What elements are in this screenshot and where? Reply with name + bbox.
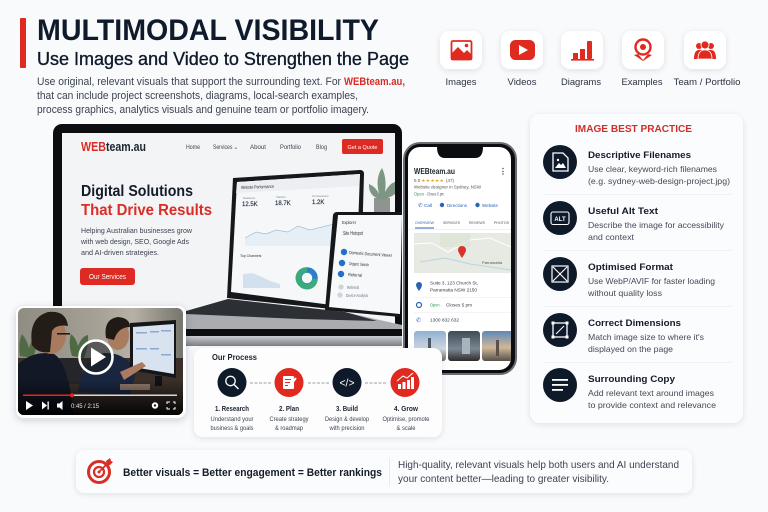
listing tabs: OVERVIEW <box>415 221 434 225</box>
keyboard base <box>186 299 402 336</box>
icon: diagrams: Diagrams <box>561 77 601 88</box>
listing action links: ✆ <box>418 202 423 209</box>
step 3: build <box>325 368 370 432</box>
icon: team / portfolio: Team / Portfolio <box>674 77 740 88</box>
step 2: plan <box>270 368 308 432</box>
header: title block <box>20 14 409 116</box>
small laptop with analytics: 18.7K <box>275 201 291 207</box>
step 2: plan: 2. Plan <box>279 404 299 413</box>
tablet: Site Hotspot <box>343 231 363 237</box>
business listing header: ★★★★★ <box>421 178 445 183</box>
intro paragraph: process graphics, analytics visuals and genuine team or portfolio imagery. <box>37 104 369 116</box>
item: descriptive filenames <box>543 145 730 186</box>
step 3: build: with precision <box>329 426 364 432</box>
step 4: grow: Optimise, promote <box>382 417 430 423</box>
item: correct dimensions: Match image size to where it's <box>588 332 704 342</box>
listing address, hours, phone: Parramatta NSW 2150 <box>430 288 478 292</box>
website nav: Blog <box>316 145 327 151</box>
business listing header: ⋮ <box>499 167 507 176</box>
play button <box>80 340 112 374</box>
laptop lid and screen <box>53 124 402 336</box>
step 3: build: </> <box>340 378 354 390</box>
step 1: research: business & goals <box>210 426 254 432</box>
small laptop with analytics: Sessions <box>243 196 256 200</box>
video player card <box>16 306 186 418</box>
website nav: Services ⌄ <box>213 145 238 151</box>
step 4: grow <box>382 368 430 432</box>
intro paragraph <box>37 76 405 116</box>
website hero copy: with web design, SEO, Google Ads <box>80 237 189 246</box>
listing tabs: REVIEWS <box>469 221 485 225</box>
panel: image best practice <box>530 114 743 423</box>
tablet: Referral <box>347 285 359 290</box>
callout: key takeaway banner <box>76 450 692 493</box>
listing tabs: PHOTOS <box>494 221 509 225</box>
small laptop with analytics: Visitors <box>276 195 286 199</box>
step 1: research: Understand your <box>210 417 254 423</box>
website nav: team.au <box>106 140 146 154</box>
listing action links: Directions <box>447 203 468 208</box>
step 1: research <box>210 368 254 432</box>
listing photos <box>414 331 514 361</box>
listing action links: Website <box>482 203 498 208</box>
item: useful alt text: Useful Alt Text <box>588 206 659 217</box>
item: optimised format: without quality loss <box>587 288 662 298</box>
icon: images <box>440 31 482 88</box>
small laptop with analytics: 12.5K <box>242 202 258 208</box>
website nav: Portfolio <box>280 145 302 151</box>
step 2: plan: & roadmap <box>275 426 304 432</box>
player controls <box>26 401 175 410</box>
business listing header: 5.0 <box>414 178 421 183</box>
phone body <box>403 142 517 375</box>
listing address, hours, phone: 1300 832 632 <box>430 318 460 322</box>
panel: our process <box>194 348 442 437</box>
item: optimised format <box>543 257 715 298</box>
takeaway headline: Better visuals = Better engagement = Better rankings <box>123 467 382 479</box>
takeaway explanation <box>398 459 679 485</box>
item: surrounding copy <box>543 368 716 410</box>
item: correct dimensions: displayed on the page <box>588 344 673 354</box>
listing address, hours, phone: Open · <box>430 302 442 308</box>
website nav <box>81 139 383 154</box>
listing tabs: SERVICES <box>443 221 460 225</box>
item: optimised format: Optimised Format <box>588 262 674 273</box>
listing action links <box>418 202 498 208</box>
map <box>414 233 511 273</box>
subtitle: Use Images and Video to Strengthen the Page <box>37 49 409 69</box>
intro paragraph: Use original, relevant visuals that support the surrounding text. For <box>37 76 341 88</box>
title: MULTIMODAL VISIBILITY <box>37 14 379 47</box>
background plant <box>369 168 395 214</box>
business listing header: WEBteam.au <box>414 167 455 176</box>
step 4: grow: & scale <box>396 426 416 432</box>
icon: examples <box>622 31 664 88</box>
listing address, hours, phone: Suite 3, 123 Church St, <box>430 280 478 286</box>
website hero copy: Helping Australian businesses grow <box>81 226 193 235</box>
tablet: Referral <box>348 272 362 278</box>
website hero copy: Our Services <box>89 274 126 281</box>
website nav: WEB <box>81 140 106 154</box>
video still: two people at a monitor <box>18 308 183 415</box>
intro paragraph: WEBteam.au, <box>344 76 405 88</box>
listing address, hours, phone: Closes 5 pm <box>446 302 472 308</box>
icon: diagrams <box>561 31 603 88</box>
icon: videos: Videos <box>508 77 537 88</box>
listing action links: Call <box>424 203 432 208</box>
icon: images: Images <box>446 77 477 88</box>
item: surrounding copy: Surrounding Copy <box>588 374 676 385</box>
player controls: 0:45 / 2:15 <box>71 403 99 410</box>
website nav: Home <box>186 145 201 151</box>
website hero copy: and AI-driven strategies. <box>81 248 159 257</box>
step 1: research: 1. Research <box>215 404 249 413</box>
website nav: Get a Quote <box>348 145 378 151</box>
item: useful alt text: ALT <box>554 217 566 223</box>
small laptop with analytics: 1.2K <box>312 200 324 206</box>
business listing header: (47) <box>446 178 455 183</box>
icon: target <box>88 458 113 482</box>
business listing header: Open <box>414 192 424 196</box>
icon: team / portfolio <box>674 31 740 88</box>
small laptop with analytics: Conversions <box>312 194 329 198</box>
item: descriptive filenames: (e.g. sydney-web-design-project.jpg) <box>588 176 730 186</box>
item: optimised format: Use WebP/AVIF for faster loading <box>588 276 715 286</box>
tablet <box>325 212 402 317</box>
small laptop with analytics: Top Channels <box>240 254 262 258</box>
website nav: About <box>250 145 266 151</box>
panel heading: IMAGE BEST PRACTICE <box>575 123 692 135</box>
listing tabs <box>408 221 511 230</box>
business listing header <box>414 167 507 196</box>
item: correct dimensions: Correct Dimensions <box>588 318 681 329</box>
step 4: grow: 4. Grow <box>394 404 418 413</box>
map: Parramatta <box>482 261 503 265</box>
red accent bar <box>20 18 26 68</box>
item: useful alt text <box>543 201 725 242</box>
media type icon row <box>440 31 740 88</box>
tablet: Organic Search <box>349 261 370 267</box>
item: surrounding copy: to provide context and relevance <box>588 400 716 410</box>
step 3: build: 3. Build <box>336 404 358 413</box>
item: correct dimensions <box>543 313 704 354</box>
icon: examples: Examples <box>622 77 663 88</box>
tablet: Explorer <box>342 220 356 225</box>
website hero copy: That Drive Results <box>81 202 212 219</box>
business listing header: · Closes 5 pm <box>425 192 444 196</box>
listing address, hours, phone: ✆ <box>416 317 421 324</box>
takeaway explanation: your content better—leading to greater visibility. <box>398 473 609 485</box>
step 2: plan: Create strategy <box>270 417 308 423</box>
listing address, hours, phone <box>414 280 511 324</box>
tablet: Domestic Document Viewer <box>349 250 393 258</box>
player controls gradient <box>18 384 183 415</box>
item: descriptive filenames: Use clear, keyword-rich filenames <box>588 164 717 174</box>
website hero copy <box>80 183 212 285</box>
website hero copy: Digital Solutions <box>81 183 193 200</box>
item: surrounding copy: Add relevant text around images <box>588 388 714 398</box>
connector dashes <box>250 382 387 384</box>
phone mockup: local search listing <box>403 142 517 375</box>
item: useful alt text: Describe the image for accessibility <box>588 220 725 230</box>
step 3: build: Design & develop <box>325 417 370 423</box>
item: useful alt text: and context <box>588 232 635 242</box>
process heading: Our Process <box>212 352 257 362</box>
takeaway explanation: High-quality, relevant visuals help both users and AI understand <box>398 459 679 471</box>
small laptop with analytics <box>227 170 364 312</box>
item: descriptive filenames: Descriptive Filenames <box>588 150 691 161</box>
laptop mockup <box>53 124 402 346</box>
icon: videos <box>501 31 543 88</box>
progress bar <box>23 393 177 397</box>
tablet: Device Analysis <box>346 293 369 298</box>
small laptop with analytics: Website Performance <box>241 184 274 190</box>
intro paragraph: that can include project screenshots, diagrams, local-search examples, <box>37 90 358 102</box>
business listing header: Website designer in Sydney, NSW <box>414 184 482 190</box>
